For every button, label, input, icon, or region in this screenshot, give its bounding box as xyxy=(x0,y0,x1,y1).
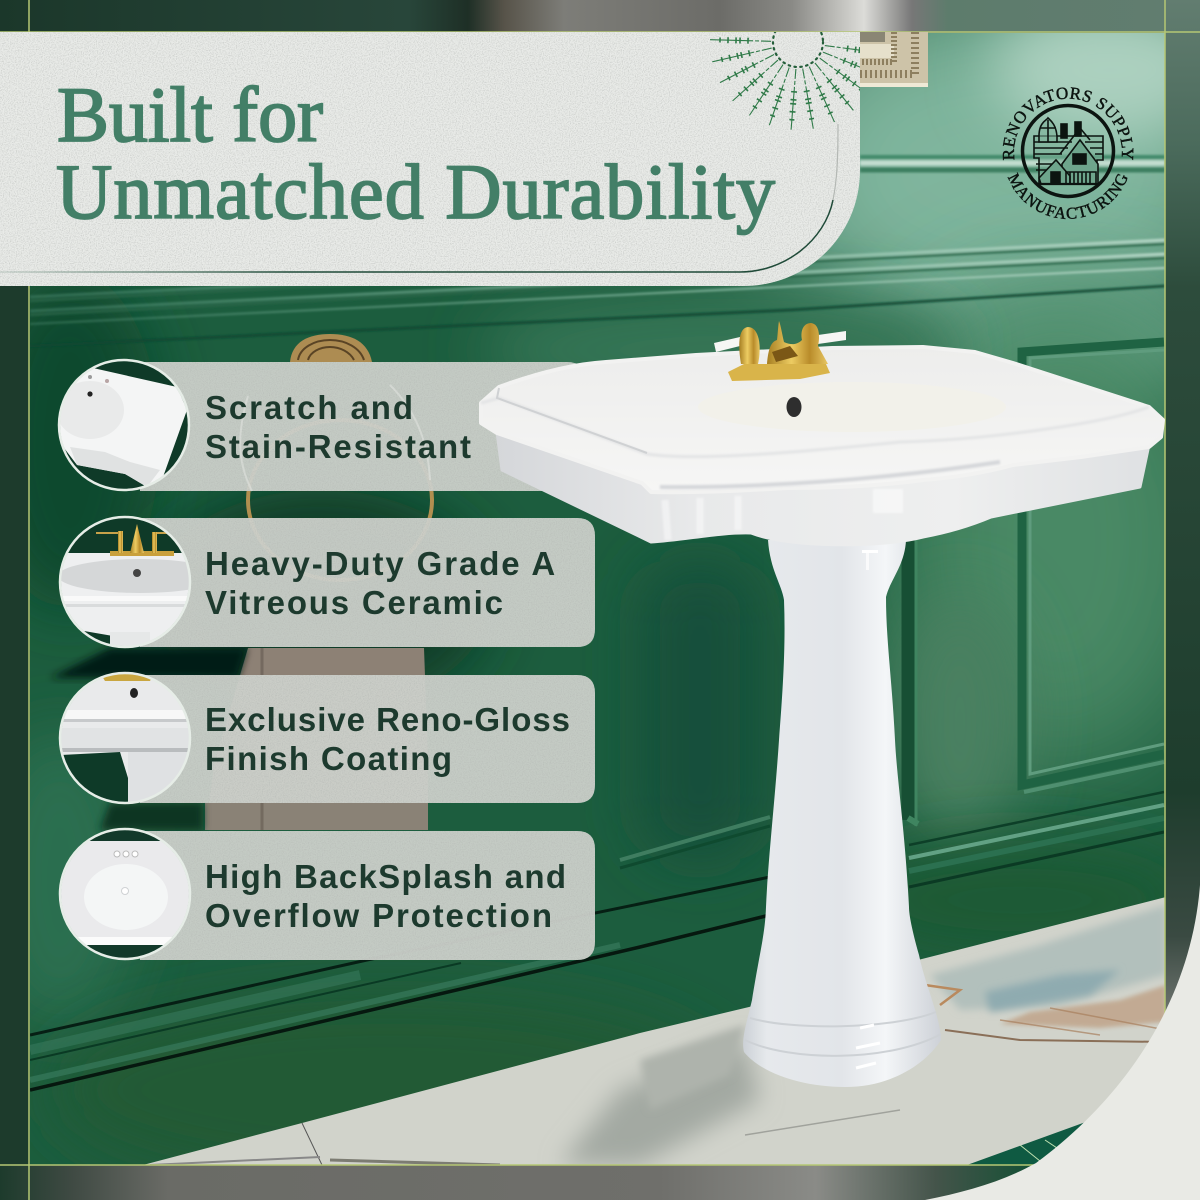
sink pedestal xyxy=(743,540,941,1087)
picture frame xyxy=(855,32,928,87)
panel: High BackSplash and Overflow Protection: High BackSplash and xyxy=(205,858,566,895)
bottom right cream corner xyxy=(925,885,1200,1200)
panel: Exclusive Reno-Gloss Finish Coating xyxy=(140,675,595,803)
sink bowl xyxy=(698,382,1006,432)
hanging towel xyxy=(50,648,428,830)
sink top surface xyxy=(481,347,1163,492)
logo: Renovators Supply Manufacturing: MANUFACTURING xyxy=(1008,172,1128,220)
thumbnail: basin corner xyxy=(56,358,190,492)
panel: Heavy-Duty Grade A Vitreous Ceramic xyxy=(140,518,595,647)
title: Unmatched Durability xyxy=(56,148,775,235)
panel: Heavy-Duty Grade A Vitreous Ceramic: Heavy-Duty Grade A xyxy=(205,545,554,582)
marble floor xyxy=(143,897,1166,1165)
title xyxy=(56,71,775,235)
logo: Renovators Supply Manufacturing: RENOVATORS SUPPLY xyxy=(1002,87,1134,160)
icon: house xyxy=(1034,118,1103,184)
title: Built for xyxy=(57,71,323,158)
panel: Heavy-Duty Grade A Vitreous Ceramic: Vitreous Ceramic xyxy=(205,584,503,621)
panel: Exclusive Reno-Gloss Finish Coating: Finish Coating xyxy=(205,740,452,777)
panel: High BackSplash and Overflow Protection: Overflow Protection xyxy=(205,897,552,934)
sink drain xyxy=(786,397,802,417)
brass faucet xyxy=(714,321,846,381)
icon: sunburst ornament xyxy=(710,32,860,130)
thumbnail: glossy rim and pedestal xyxy=(58,672,192,806)
panel: Scratch and Stain-Resistant xyxy=(140,362,585,491)
wainscot base moulding xyxy=(30,792,1164,1090)
panel: Exclusive Reno-Gloss Finish Coating: Exclusive Reno-Gloss xyxy=(205,701,570,738)
panel: Scratch and Stain-Resistant: Stain-Resistant xyxy=(205,428,471,465)
wall chair rail moulding xyxy=(30,157,1165,346)
panel: High BackSplash and Overflow Protection xyxy=(140,831,595,960)
gold towel ring xyxy=(248,334,432,580)
pedestal sink xyxy=(481,321,1163,1087)
panel: Scratch and Stain-Resistant: Scratch and xyxy=(205,389,413,426)
wall panel mouldings xyxy=(908,342,1164,826)
thumbnail: faucet and basin xyxy=(58,516,192,648)
logo: Renovators Supply Manufacturing xyxy=(1002,87,1134,220)
thumbnail: top view of basin xyxy=(58,828,192,962)
panel: title header xyxy=(0,17,886,286)
sink basin apron xyxy=(497,432,1150,545)
